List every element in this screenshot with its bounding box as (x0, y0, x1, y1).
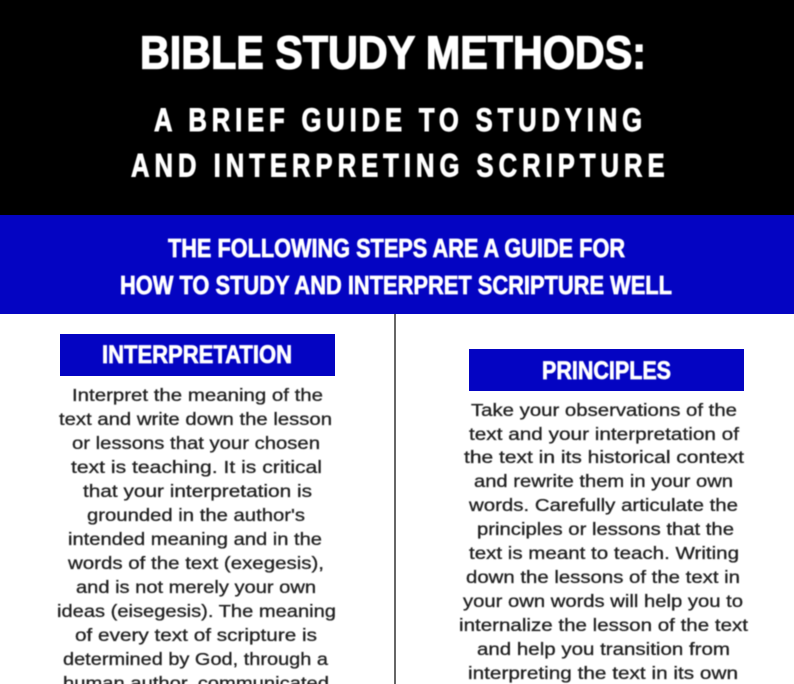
text block: interpretation: Interpret the meaning of the (72, 385, 323, 405)
text block: interpretation: words of the text (exegesis), (67, 553, 324, 573)
title: BIBLE STUDY METHODS: (140, 26, 646, 78)
text block: interpretation: determined by God, through a (63, 649, 328, 669)
text block: principles: principles or lessons that the (477, 519, 734, 539)
text block: interpretation: of every text of scripture is (75, 625, 317, 645)
heading: interpretation: INTERPRETATION (102, 341, 292, 369)
text block: principles: your own words will help you to (463, 591, 743, 611)
text block: principles: down the lessons of the text in (466, 567, 740, 587)
heading: principles (469, 349, 744, 391)
column divider (394, 314, 396, 684)
subtitle: AND INTERPRETING SCRIPTURE (131, 149, 665, 184)
panel: interpretation (57, 334, 336, 684)
text block: principles: and rewrite them in your own (474, 471, 733, 491)
intro text: THE FOLLOWING STEPS ARE A GUIDE FOR (168, 235, 625, 263)
text block: interpretation (57, 385, 336, 684)
text block: interpretation: and is not merely your own (76, 577, 316, 597)
header panel (0, 0, 794, 215)
text block: interpretation: grounded in the author's (87, 505, 305, 525)
intro text (120, 235, 672, 300)
text block: interpretation: intended meaning and in the (68, 529, 322, 549)
text block: principles: words. Carefully articulate the (468, 495, 738, 515)
text block: interpretation: text and write down the lesson (59, 409, 332, 429)
text block: principles: text and your interpretation of (469, 424, 739, 444)
text block: principles: internalize the lesson of the text (459, 615, 748, 635)
text block: interpretation: that your interpretation is (83, 481, 312, 501)
blue intro band (0, 215, 794, 314)
text block: principles: Take your observations of the (471, 400, 737, 420)
text block: principles: the text in its historical context (464, 447, 744, 467)
heading: interpretation (60, 334, 335, 376)
text block: principles: interpreting the text in its own (468, 663, 738, 683)
text block: interpretation: or lessons that your chosen (72, 433, 320, 453)
text block: principles (459, 400, 748, 683)
intro text: HOW TO STUDY AND INTERPRET SCRIPTURE WELL (120, 272, 672, 300)
heading: principles: PRINCIPLES (542, 357, 671, 385)
subtitle: A BRIEF GUIDE TO STUDYING (154, 103, 642, 139)
text block: interpretation: ideas (eisegesis). The meaning (57, 601, 336, 621)
text block: interpretation: text is teaching. It is critical (71, 457, 322, 477)
text block: principles: and help you transition from (477, 639, 730, 659)
text block: principles: text is meant to teach. Writing (469, 543, 739, 563)
panel: principles (459, 349, 748, 683)
subtitle (131, 103, 665, 184)
